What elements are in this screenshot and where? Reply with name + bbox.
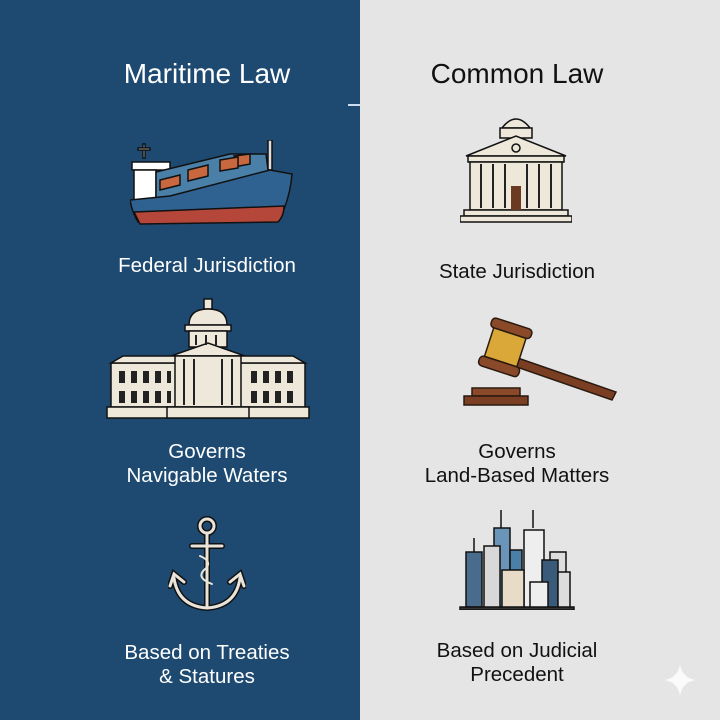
panel: common law	[360, 0, 720, 720]
heading: common law: Common Law	[431, 58, 603, 89]
divider mark	[348, 104, 372, 106]
text: federal jurisdiction: Federal Jurisdiction	[118, 254, 296, 277]
text: governs navigable waters: Governs	[168, 440, 246, 463]
icon: anchor	[168, 516, 246, 611]
text: state jurisdiction: State Jurisdiction	[439, 260, 595, 283]
icon: courthouse	[460, 118, 572, 223]
text: based on treaties: & Statures	[159, 665, 255, 688]
icon: city skyline	[459, 510, 575, 610]
text: based on treaties: Based on Treaties	[124, 641, 290, 664]
text: governs land-based matters: Land-Based Matters	[425, 464, 609, 487]
icon: gavel	[463, 317, 617, 406]
heading: maritime law: Maritime Law	[124, 58, 290, 89]
text: governs navigable waters	[126, 440, 288, 487]
icon: container ship	[130, 140, 293, 225]
text: based on judicial precedent	[437, 639, 597, 686]
text: based on judicial precedent: Based on Judicial	[437, 639, 597, 662]
icon: capitol building	[106, 298, 310, 419]
icon: sparkle	[665, 665, 695, 695]
text: governs navigable waters: Navigable Waters	[126, 464, 288, 487]
panel: maritime law	[0, 0, 360, 720]
text: based on judicial precedent: Precedent	[470, 663, 564, 686]
text: governs land-based matters	[425, 440, 609, 487]
text: governs land-based matters: Governs	[478, 440, 556, 463]
text: based on treaties	[124, 641, 290, 688]
